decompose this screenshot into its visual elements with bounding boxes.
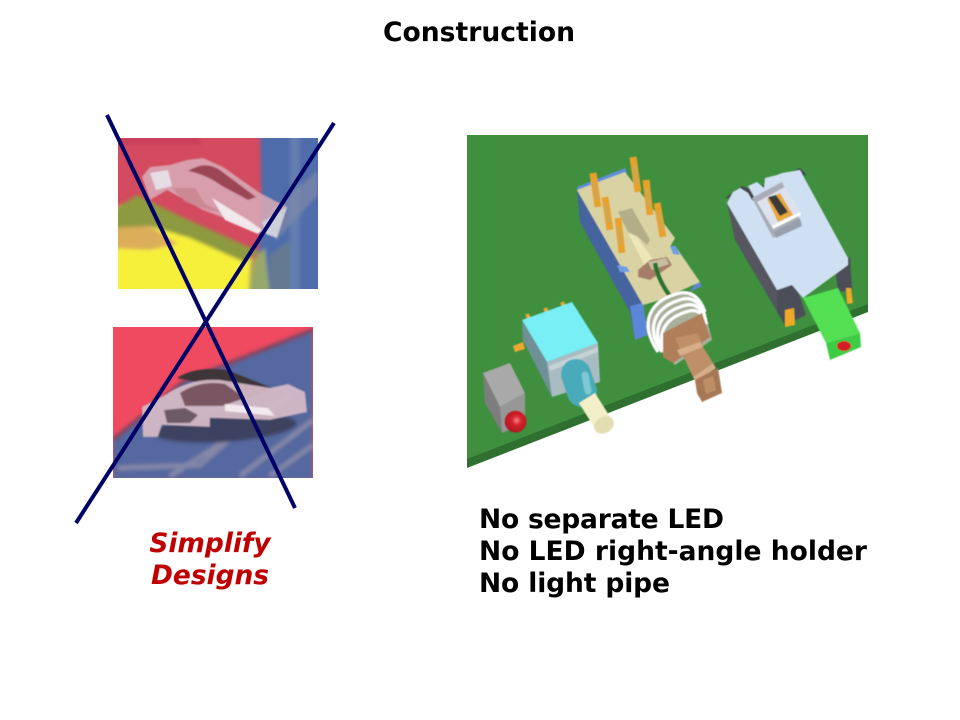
separate led (483, 363, 526, 433)
photo: LED holder on circuit board (113, 327, 313, 480)
photo: LED holder on yellow and red board (118, 138, 318, 289)
feature list: No light pipe (479, 568, 670, 599)
feature list: No separate LED (479, 504, 724, 535)
illustration: circuit board with switches (467, 135, 868, 468)
feature list (479, 504, 867, 599)
title: Construction (383, 17, 575, 48)
small pushbutton switch (513, 302, 617, 437)
surface mount switch with green lens (725, 168, 861, 360)
caption: simplify designs: Designs (151, 560, 269, 591)
feature list: No LED right-angle holder (479, 536, 867, 567)
circuit board (467, 135, 868, 468)
caption: simplify designs (149, 528, 272, 591)
x mark: crossing out the photos (76, 115, 334, 523)
caption: simplify designs: Simplify (149, 528, 272, 559)
large switch with spring (577, 157, 722, 402)
